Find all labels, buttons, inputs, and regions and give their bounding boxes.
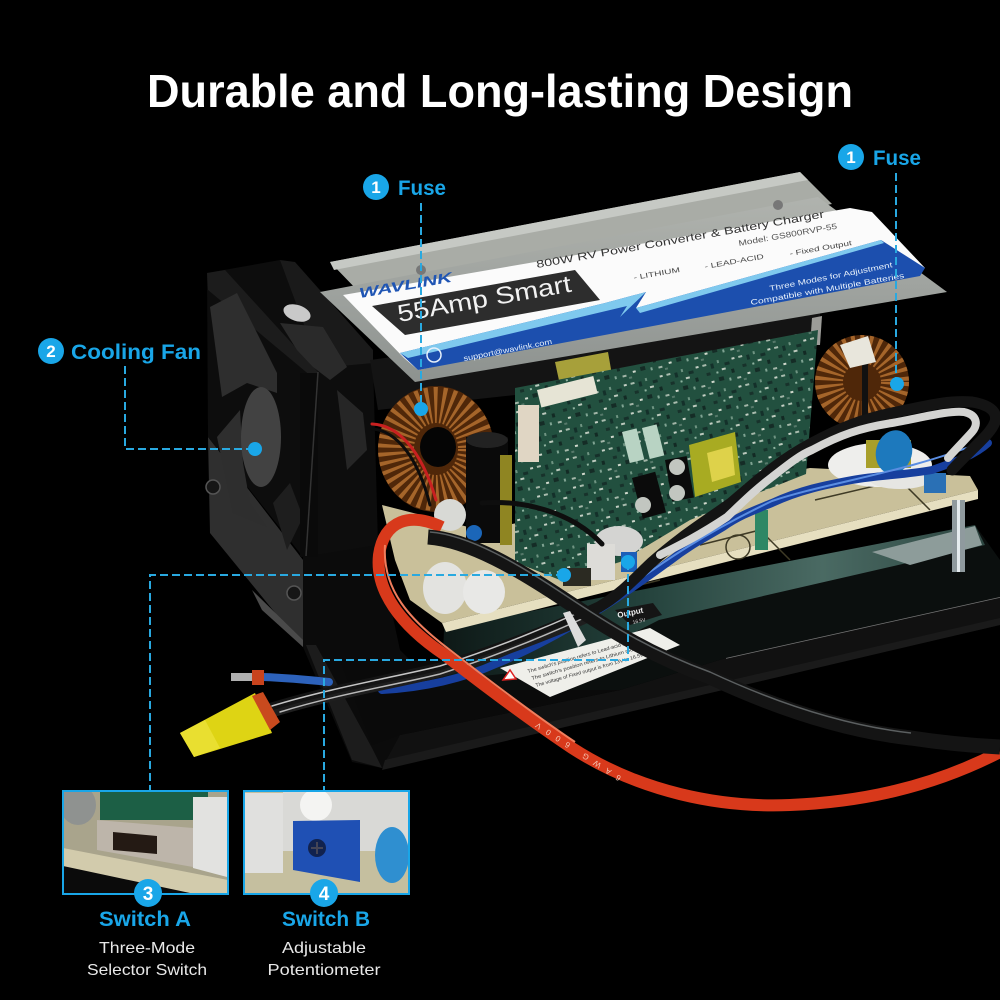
leader line: switch B (324, 555, 635, 790)
switch B caption (268, 879, 381, 979)
top metal plate with label: Compatible with Multiple Batteries (750, 271, 905, 307)
switch A caption: 3 (143, 884, 153, 905)
top metal plate with label: support@wavlink.com (463, 337, 553, 363)
tray reflective surface (444, 525, 985, 680)
switch A caption: Switch A (99, 908, 191, 931)
callout: fuse 1 right: 1 (846, 148, 856, 167)
title: Durable and Long-lasting Design (147, 65, 853, 117)
cooling fan (207, 260, 378, 557)
switch B caption: Adjustable (282, 940, 366, 957)
switch A caption: Selector Switch (87, 962, 207, 979)
green control board (515, 330, 818, 580)
warning sticker: The switch's position refers to Lead-acid mode (527, 638, 636, 675)
top metal plate with label: - LEAD-ACID (704, 254, 764, 271)
red cable (379, 520, 1000, 805)
inset: switch A photo (60, 785, 228, 894)
chassis side and base plate (206, 437, 1000, 770)
warning sticker: The switch's position refers to Lithium mode (531, 645, 640, 682)
callout: fuse 1 right (838, 144, 921, 391)
cream circuit board (382, 468, 978, 632)
dark interior under plate (370, 300, 822, 410)
aluminium tray (440, 525, 1000, 690)
product photo: converter (180, 172, 1000, 805)
switch B caption: Switch B (282, 908, 370, 931)
callout: cooling fan: 2 (46, 342, 56, 361)
yellow wire connector (180, 692, 280, 757)
top metal plate with label: WAVLINK (358, 269, 454, 301)
callout: fuse 1 right: Fuse (873, 147, 921, 170)
red cable: 6AWG 600V (533, 720, 623, 783)
output sticker: Output (617, 606, 644, 620)
left copper coil (378, 386, 494, 512)
callout: cooling fan: Cooling Fan (71, 341, 201, 364)
top metal plate with label: - LITHIUM (633, 267, 681, 282)
callout: fuse 1 center: Fuse (398, 177, 446, 200)
top metal plate with label (320, 172, 947, 382)
white insulated parts and capacitors (423, 426, 946, 614)
callout: fuse 1 center (363, 174, 446, 416)
black cable (428, 532, 1000, 747)
switch A caption: Three-Mode (99, 940, 195, 957)
leader line: switch A (150, 568, 571, 790)
output sticker: 16.5V (632, 617, 647, 626)
top metal plate with label: 800W RV Power Converter & Battery Charger (535, 208, 826, 271)
standoff and mount (872, 500, 982, 572)
switch B caption: Potentiometer (268, 962, 381, 979)
top metal plate with label: 55Amp Smart (395, 271, 574, 328)
warning sticker: The voltage of Fixed output is from 13V to 16.5V (535, 652, 645, 689)
board components (518, 376, 741, 586)
callout: fuse 1 center: 1 (371, 178, 381, 197)
callout: cooling fan (38, 338, 262, 456)
top metal plate with label: Three Modes for Adjustment (769, 260, 894, 293)
warning sticker (500, 628, 680, 697)
crimp terminal (231, 670, 264, 685)
output sticker (615, 603, 662, 626)
cable tie (563, 611, 586, 647)
top metal plate with label: Model: GS800RVP-55 (738, 222, 839, 248)
top metal plate with label: - Fixed Output (789, 240, 852, 258)
cable bundle (263, 402, 996, 714)
right copper coil (815, 335, 909, 429)
switch A caption (87, 879, 207, 979)
inset: switch B photo (244, 789, 409, 894)
switch B caption: 4 (319, 884, 330, 905)
